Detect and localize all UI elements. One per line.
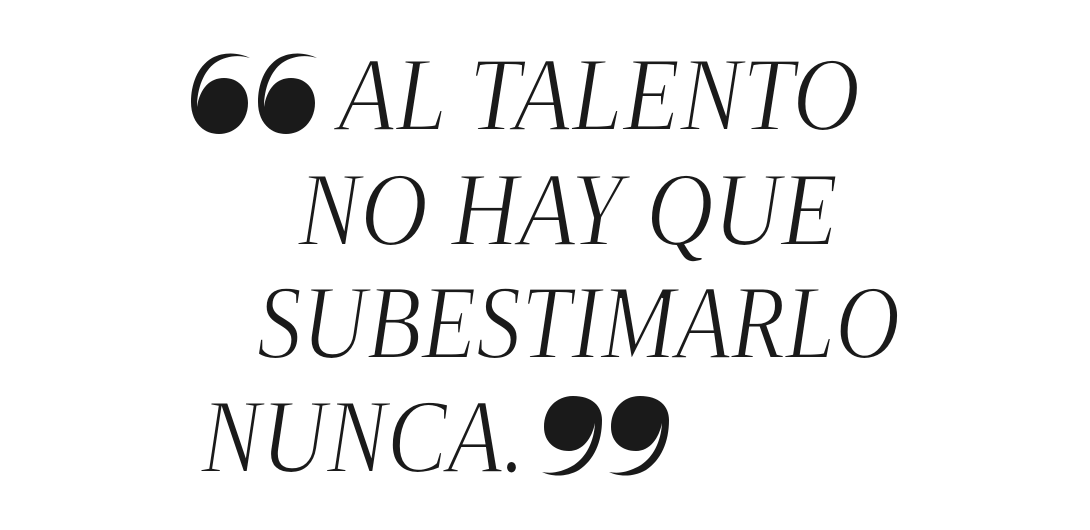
quote line 4: NUNCA.	[200, 378, 525, 495]
quote line 3: SUBESTIMARLO	[257, 264, 900, 381]
quote line 1: AL TALENTO	[333, 36, 860, 153]
icon: closing quotation marks	[542, 396, 669, 476]
icon: opening quotation marks	[191, 53, 317, 134]
quote line 2: NO HAY QUE	[297, 151, 838, 268]
